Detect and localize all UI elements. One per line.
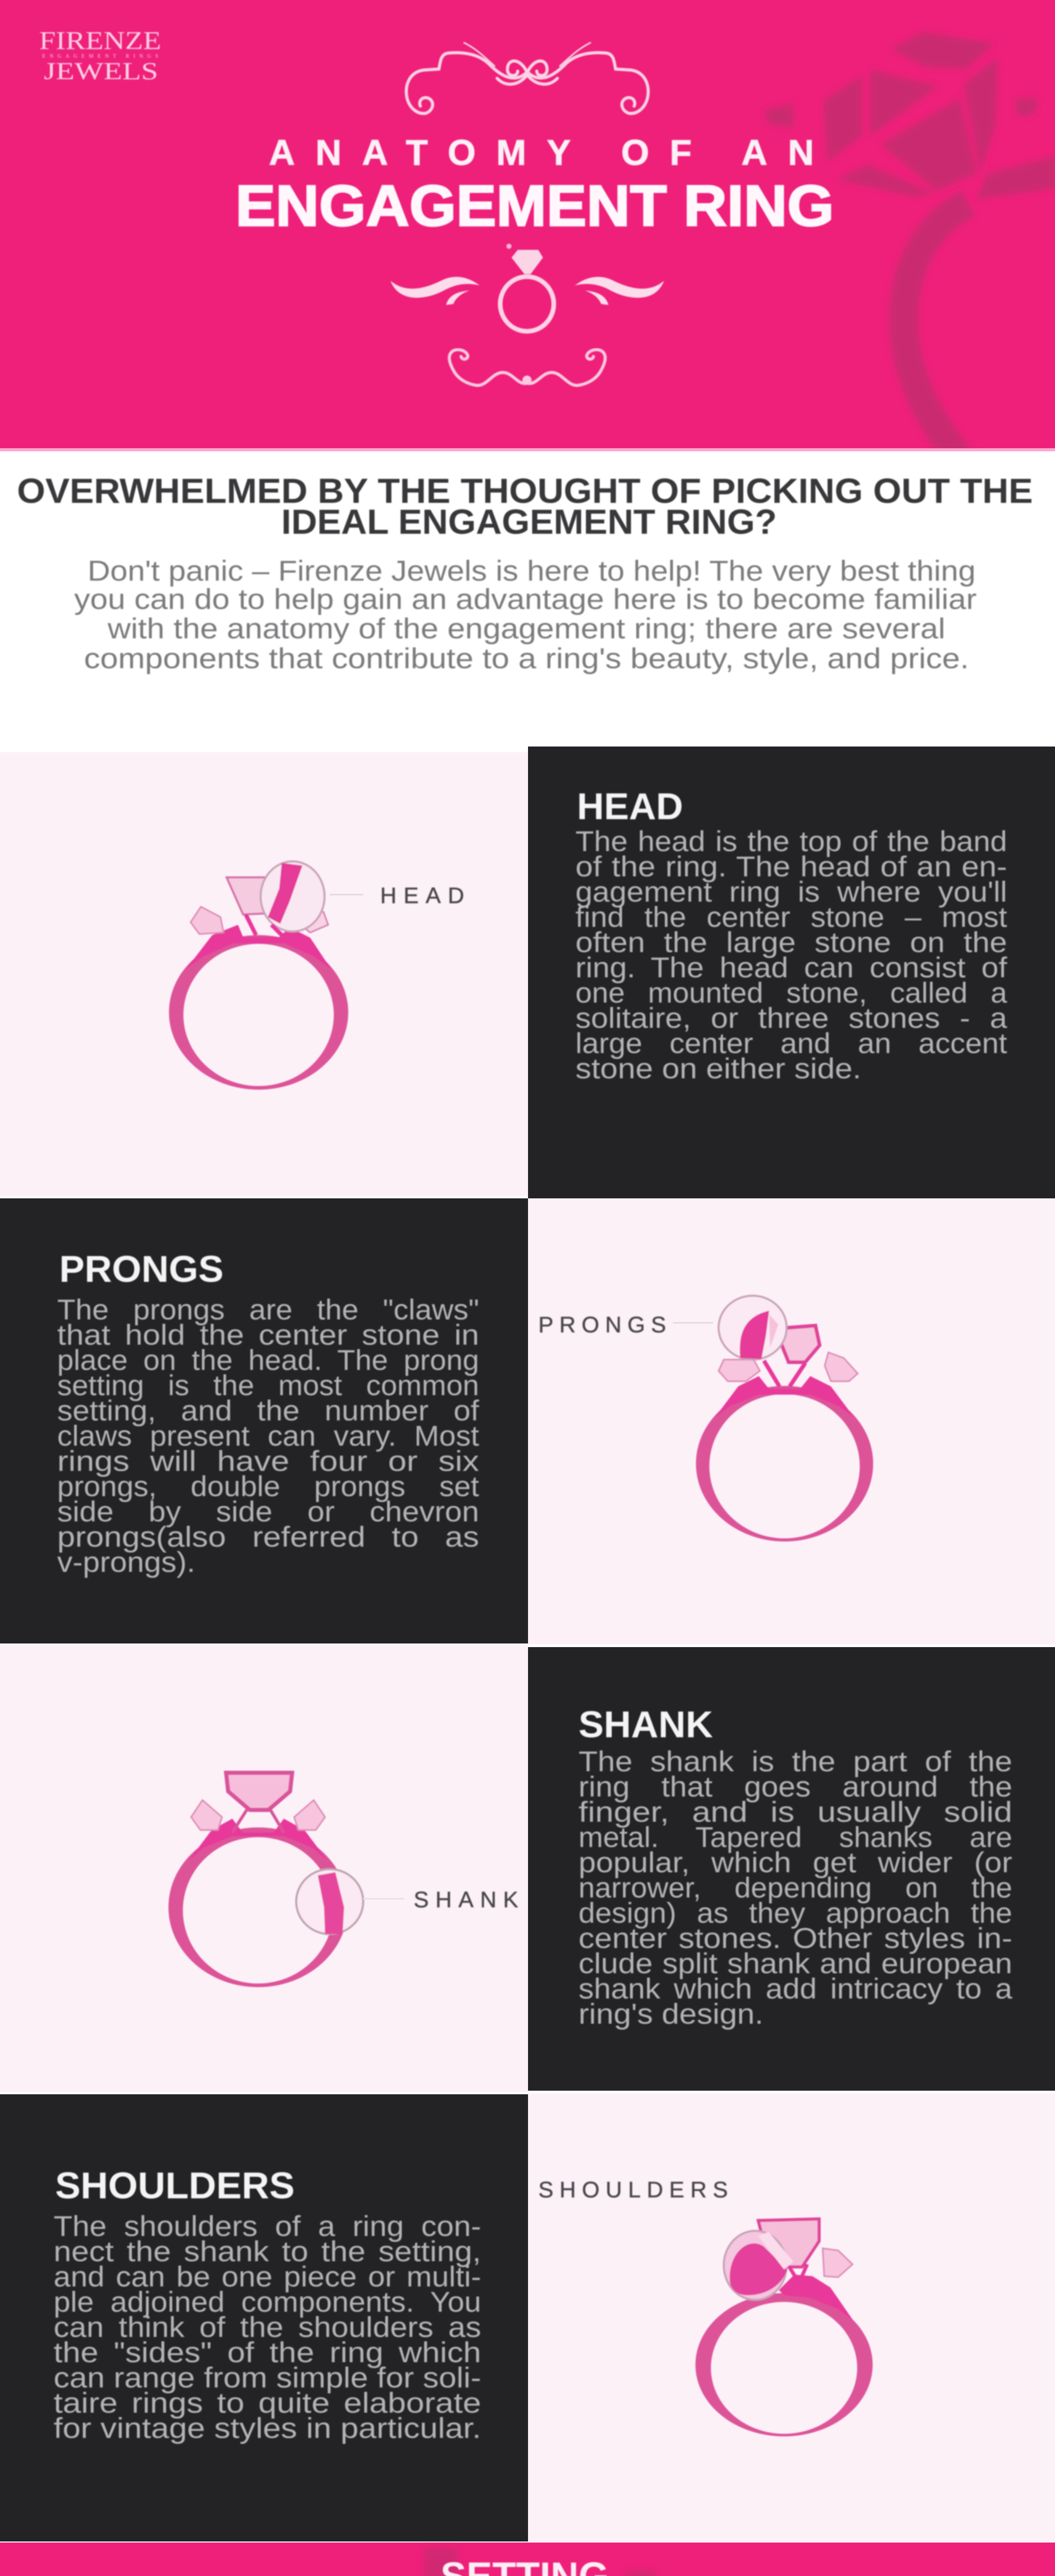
body: shoulders: can range from simple for soli-	[54, 2361, 481, 2394]
intro block	[17, 471, 1033, 674]
body: shank: The shank is the part of the	[578, 1745, 1012, 1777]
highlight circle on shank	[296, 1869, 363, 1934]
connector line	[363, 1898, 404, 1900]
body: shank: finger, and is usually solid	[578, 1795, 1012, 1828]
intro text: Don't panic – Firenze Jewels is here to help! The very best thing	[88, 554, 976, 587]
intro heading	[17, 471, 1033, 541]
panel: setting	[0, 2543, 1055, 2576]
body: head: large center and an accent	[575, 1027, 1007, 1059]
watermark: ring behind setting text	[170, 2548, 656, 2576]
panel: prongs illustration	[528, 1198, 1055, 1645]
label: shank: SHANK	[414, 1887, 518, 1912]
body: shank	[578, 1745, 1013, 2030]
body: shank: narrower, depending on the	[578, 1871, 1012, 1904]
body: shank: design) as they approach the	[578, 1896, 1012, 1929]
heading: shank: SHANK	[578, 1704, 713, 1745]
label: shoulders: SHOULDERS	[538, 2177, 728, 2202]
body: shoulders: The shoulders of a ring con-	[54, 2210, 481, 2242]
body: head: often the large stone on the	[575, 926, 1007, 958]
body: shoulders: taire rings to quite elaborate	[54, 2386, 481, 2419]
logo	[39, 26, 161, 85]
panel: shoulders text	[0, 2094, 528, 2541]
highlight circle on prong	[719, 1296, 787, 1360]
body: prongs: place on the head. The prong	[57, 1344, 479, 1376]
connector line	[673, 1322, 713, 1324]
heading: head: HEAD	[577, 786, 683, 827]
icon: ring with swashes	[390, 244, 664, 331]
header panel	[0, 0, 1055, 464]
label: prongs: PRONGS	[538, 1312, 666, 1337]
title: ENGAGEMENT RING	[235, 174, 834, 238]
intro text: with the anatomy of the engagement ring; there are several	[107, 612, 945, 645]
watermark: large ring with diamond	[764, 32, 1055, 464]
title	[235, 132, 834, 238]
body: shoulders: and can be one piece or multi-	[54, 2260, 481, 2293]
body: head: one mounted stone, called a	[575, 976, 1008, 1009]
connector line	[330, 894, 363, 895]
body: shank: shank which add intricacy to a	[578, 1972, 1013, 2005]
body: shoulders: ple adjoined components. You	[54, 2285, 481, 2318]
body: shoulders: the "sides" of the ring which	[54, 2336, 481, 2368]
intro text	[74, 554, 977, 674]
body: shank: clude split shank and european	[578, 1947, 1012, 1979]
logo: ENGAGEMENT RINGS	[42, 54, 158, 59]
body: head: stone on either side.	[575, 1052, 861, 1084]
panel: head text	[528, 747, 1055, 1198]
panel: head illustration	[0, 752, 528, 1196]
body: head	[575, 825, 1008, 1084]
body: shank: popular, which get wider (or	[578, 1846, 1012, 1878]
body: head: of the ring. The head of an en-	[575, 850, 1007, 883]
body: shank: metal. Tapered shanks are	[578, 1821, 1012, 1853]
body: head: find the center stone – most	[575, 901, 1007, 933]
intro heading: OVERWHELMED BY THE THOUGHT OF PICKING OUT THE	[17, 471, 1033, 511]
body: prongs: setting is the most common	[57, 1369, 479, 1401]
body: prongs: rings will have four or six	[57, 1445, 479, 1477]
intro heading: IDEAL ENGAGEMENT RING?	[281, 502, 777, 541]
title: ANATOMY OF AN	[269, 132, 814, 173]
logo: FIRENZE	[39, 26, 161, 55]
heading: shoulders: SHOULDERS	[55, 2165, 295, 2207]
body: prongs: prongs(also referred to as	[57, 1520, 479, 1553]
ring: shank highlighted	[168, 1773, 363, 1987]
body: shoulders: for vintage styles in particular.	[54, 2412, 481, 2444]
heading: prongs: PRONGS	[59, 1249, 224, 1290]
intro text: components that contribute to a ring's beauty, style, and price.	[84, 642, 969, 674]
body: prongs: setting, and the number of	[57, 1394, 479, 1427]
panel: shank illustration	[0, 1645, 528, 2092]
body: shoulders: can think of the shoulders as	[54, 2311, 481, 2343]
bottom flourish	[449, 350, 605, 385]
panel: shoulders illustration	[528, 2093, 1055, 2541]
body: shank: ring that goes around the	[578, 1770, 1012, 1803]
body: shank: center stones. Other styles in-	[578, 1922, 1012, 1954]
label: head: HEAD	[380, 883, 464, 908]
body: prongs	[57, 1293, 479, 1578]
ring: shoulders highlighted	[695, 2219, 873, 2436]
body: head: The head is the top of the band	[575, 825, 1007, 857]
logo: JEWELS	[44, 58, 158, 85]
panel: prongs text	[0, 1198, 528, 1643]
body: prongs: that hold the center stone in	[57, 1318, 479, 1351]
body: head: ring. The head can consist of	[575, 951, 1007, 984]
body: shank: ring's design.	[578, 1997, 763, 2030]
body: prongs: prongs, double prongs set	[57, 1470, 479, 1502]
highlight circle on head	[261, 861, 325, 931]
body: shoulders: nect the shank to the setting,	[54, 2235, 481, 2267]
body: shoulders	[54, 2210, 481, 2444]
body: prongs: side by side or chevron	[57, 1495, 479, 1528]
body: prongs: The prongs are the "claws"	[57, 1293, 479, 1326]
body: prongs: claws present can vary. Most	[57, 1419, 479, 1452]
intro text: you can do to help gain an advantage here is to become familiar	[74, 583, 977, 615]
panel: shank text	[528, 1647, 1055, 2091]
body: prongs: v-prongs).	[57, 1546, 195, 1578]
top flourish	[406, 43, 648, 113]
highlight circle on shoulder	[724, 2231, 793, 2300]
ring: prongs highlighted	[696, 1296, 873, 1541]
ring: head highlighted	[169, 861, 348, 1090]
body: head: gagement ring is where you'll	[575, 875, 1007, 908]
body: head: solitaire, or three stones - a	[575, 1002, 1008, 1034]
